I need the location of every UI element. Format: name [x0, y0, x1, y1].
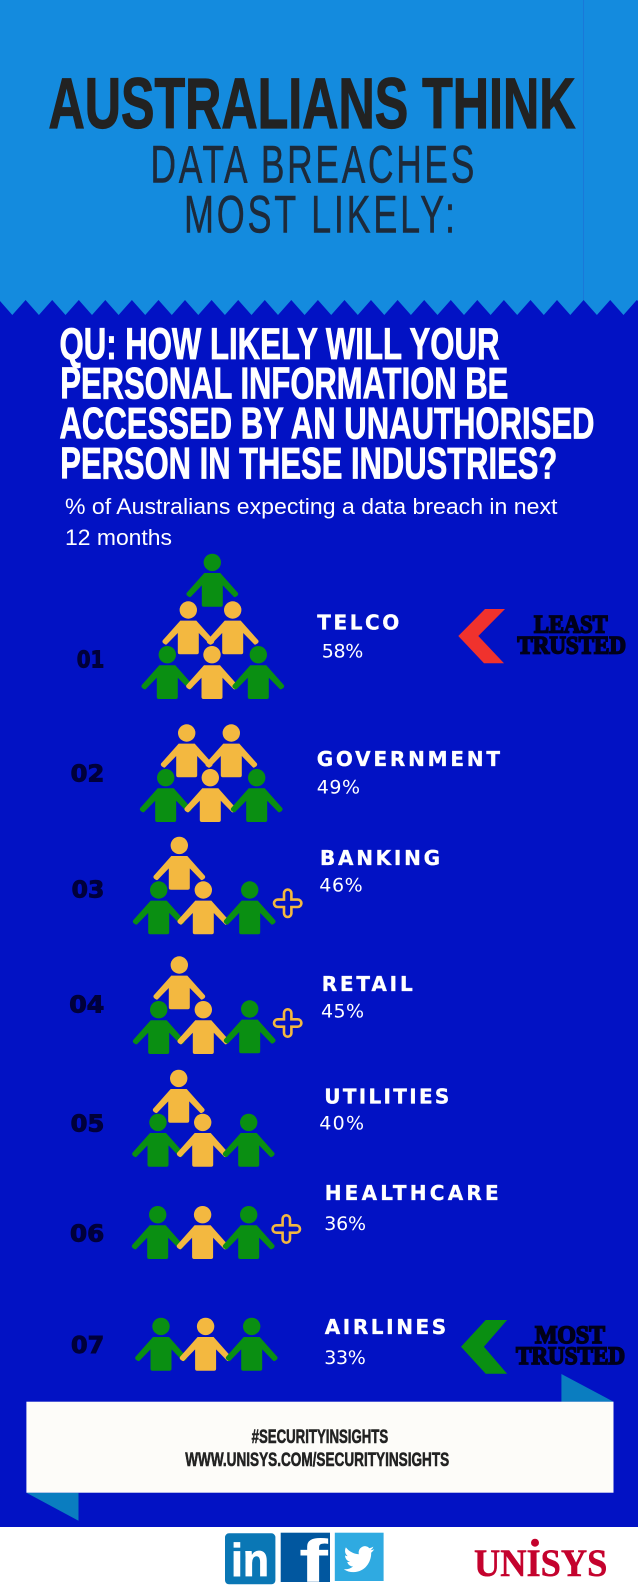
value: 58%: 58% [322, 640, 363, 662]
value: 33%: 33% [324, 1347, 366, 1369]
value: 49%: 49% [317, 776, 360, 798]
callout: hashtag and website [26, 1402, 613, 1493]
rank 02: 02 [71, 762, 104, 788]
label: government: GOVERNMENT [317, 747, 500, 771]
title: MOST LIKELY: [184, 185, 458, 244]
label: utilities: UTILITIES [324, 1084, 449, 1108]
header panel with zigzag edge [0, 0, 638, 315]
icon: linkedin: in [231, 1534, 269, 1586]
icon: facebook [281, 1527, 330, 1595]
row 01: telco [77, 554, 626, 699]
callout: hashtag and website: WWW.UNISYS.COM/SECURITYINSIGHTS [185, 1449, 449, 1471]
most trusted label [516, 1322, 625, 1370]
label: telco: TELCO [317, 610, 399, 634]
icon: twitter [335, 1533, 384, 1581]
ribbon fold: top right [561, 1374, 614, 1402]
rank 04: 04 [69, 992, 104, 1018]
label: retail: RETAIL [322, 972, 413, 996]
value: 36%: 36% [324, 1213, 366, 1235]
arrow: least trusted chevron [458, 609, 505, 663]
survey question heading [60, 320, 594, 489]
people icons: retail 45% [133, 956, 298, 1054]
rank 07: 07 [71, 1333, 104, 1359]
people icons: banking 46% [133, 837, 298, 934]
row 06: healthcare [70, 1181, 499, 1259]
people icons: government 49% [140, 724, 283, 822]
row 04: retail [69, 956, 413, 1054]
row 02: government [71, 724, 500, 822]
rank 03: 03 [72, 878, 104, 904]
subtitle text: 12 months [65, 525, 172, 550]
people icons: airlines 33% [135, 1318, 278, 1371]
title: DATA BREACHES [150, 136, 477, 195]
subtitle text [65, 494, 557, 550]
people icons: utilities 40% [132, 1070, 275, 1167]
title [48, 65, 576, 244]
least trusted label: LEAST [534, 611, 608, 638]
least trusted label [517, 611, 626, 660]
row 05: utilities [71, 1070, 449, 1167]
icon: facebook: f [299, 1527, 329, 1595]
ribbon fold: bottom left [26, 1493, 78, 1521]
value: 40%: 40% [319, 1112, 364, 1134]
value: 45%: 45% [321, 1001, 364, 1023]
row 03: banking [72, 837, 440, 934]
arrow: most trusted chevron [461, 1320, 507, 1374]
callout: hashtag and website: #SECURITYINSIGHTS [252, 1426, 388, 1448]
people icons: telco 58% [141, 554, 284, 699]
most trusted label: TRUSTED [516, 1343, 625, 1370]
rank 01: 01 [77, 648, 104, 674]
most trusted label: MOST [535, 1322, 605, 1349]
rank 06: 06 [70, 1222, 104, 1248]
label: airlines: AIRLINES [325, 1315, 446, 1339]
logo: unisys: UNISYS [474, 1542, 607, 1585]
rank 05: 05 [71, 1112, 104, 1138]
value: 46%: 46% [319, 875, 363, 897]
least trusted label: TRUSTED [517, 633, 626, 660]
subtitle text: % of Australians expecting a data breach in next [65, 494, 557, 519]
people icons: healthcare 36% [132, 1206, 296, 1259]
label: healthcare: HEALTHCARE [325, 1181, 499, 1205]
row 07: airlines [71, 1315, 625, 1374]
label: banking: BANKING [320, 846, 440, 870]
